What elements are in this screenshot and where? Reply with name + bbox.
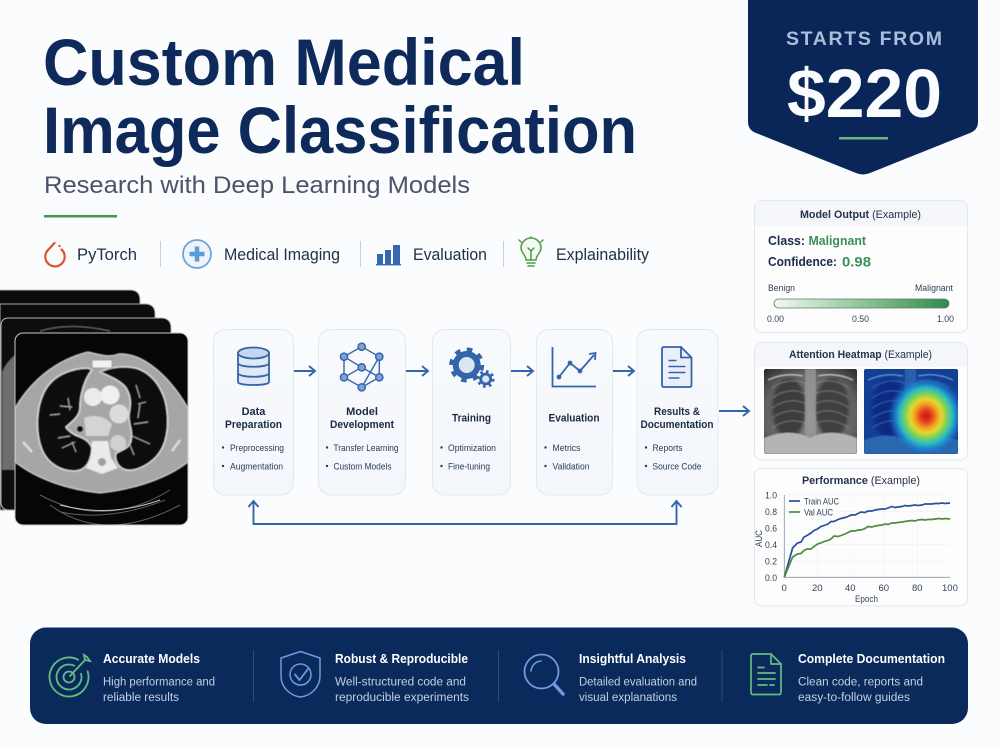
step: Evaluation: Metrics — [552, 443, 581, 454]
step: Data Preparation: Preparation — [225, 419, 282, 431]
benefit: Accurate Models: reliable results — [103, 692, 179, 704]
line chart: 1.0 — [765, 490, 777, 502]
benefit: Accurate Models — [45, 652, 215, 704]
price badge: STARTS FROM — [786, 28, 942, 50]
benefit: Insightful Analysis: visual explanations — [579, 692, 677, 704]
heatmap overlay on X-ray — [864, 369, 964, 456]
tag row — [45, 237, 650, 268]
chart legend: Val AUC — [804, 508, 833, 518]
icon: light bulb — [519, 237, 543, 266]
line chart: 40 — [845, 583, 856, 594]
step: Model Development: Transfer Learning — [334, 443, 398, 454]
benefit: Robust and Reproducible — [281, 652, 469, 704]
benefit: Insightful Analysis — [524, 652, 697, 704]
icon: bar chart — [376, 245, 401, 265]
step: Results and Documentation: Documentation — [640, 419, 714, 431]
CT main slice — [15, 333, 188, 525]
benefit: Robust and Reproducible: Robust & Reproducible — [335, 652, 468, 666]
benefit: Robust and Reproducible: reproducible experiments — [335, 692, 469, 704]
title: Custom Medical — [43, 25, 525, 99]
CT scan stack — [0, 290, 188, 525]
step: Evaluation — [536, 330, 612, 495]
arrows between steps — [294, 366, 749, 416]
benefit: Insightful Analysis: Detailed evaluation and — [579, 676, 697, 688]
step: Training: Fine-tuning — [448, 462, 490, 472]
step: Training: Training — [452, 412, 491, 424]
benefit: Complete Documentation: easy-to-follow guides — [798, 692, 910, 704]
line chart: 0.0 — [765, 573, 777, 584]
confidence result: Confidence: — [768, 255, 837, 269]
line chart: Epoch — [855, 594, 878, 605]
subtitle accent line — [44, 215, 117, 218]
chart legend: Train AUC — [804, 496, 839, 508]
line chart: 0.4 — [765, 540, 777, 551]
gauge: 1.00 — [937, 314, 954, 324]
step: Evaluation: Evaluation — [548, 412, 600, 424]
line chart: 20 — [812, 583, 823, 594]
icon: gears — [452, 350, 493, 386]
step: Model Development: Development — [330, 419, 394, 431]
benefits bar — [30, 628, 968, 724]
tag: Evaluation: Evaluation — [413, 246, 487, 264]
benefit: Complete Documentation: Complete Documentation — [798, 652, 945, 666]
gauge: 0.00 — [767, 314, 784, 324]
tag: Medical Imaging: Medical Imaging — [224, 246, 340, 264]
line chart: 60 — [878, 583, 889, 594]
step: Data Preparation: Preprocessing — [230, 443, 284, 454]
line chart — [754, 490, 958, 605]
benefit: Complete Documentation — [751, 652, 945, 704]
benefit: Accurate Models: High performance and — [103, 676, 215, 688]
step: Training — [432, 330, 510, 495]
icon: document — [751, 654, 781, 694]
step: Model Development — [318, 330, 406, 495]
price badge — [748, 0, 978, 174]
line chart: 0.2 — [765, 556, 777, 568]
icon: database — [238, 348, 269, 385]
feedback loop arrow — [248, 501, 682, 524]
icon: magnifier — [524, 654, 563, 694]
step: Results and Documentation: Reports — [652, 443, 683, 454]
title — [43, 25, 637, 167]
step: Results and Documentation: Source Code — [652, 462, 702, 472]
step: Training: Optimization — [448, 443, 496, 454]
panel: model output: 0.98 — [842, 254, 871, 270]
panel heading: Model Output (Example) — [800, 209, 921, 221]
workflow — [214, 330, 749, 524]
CT back slices — [0, 290, 171, 510]
benefit: Complete Documentation: Clean code, reports and — [798, 676, 923, 688]
tag: PyTorch: PyTorch — [77, 246, 137, 264]
gauge: Benign — [768, 283, 795, 293]
line chart: AUC — [754, 530, 764, 547]
panel heading: Performance (Example) — [802, 475, 920, 487]
icon: document — [662, 347, 692, 387]
panel: performance chart — [754, 468, 968, 606]
chart legend — [789, 496, 839, 518]
gauge — [767, 283, 954, 324]
line chart: 0 — [782, 583, 787, 594]
panel heading: Attention Heatmap (Example) — [789, 349, 932, 361]
benefit: Robust and Reproducible: Well-structured code and — [335, 676, 466, 688]
price badge: $220 — [787, 55, 942, 132]
icon: target — [45, 653, 93, 701]
step: Results and Documentation: Results & — [654, 406, 700, 418]
step: Model Development: Custom Models — [334, 462, 392, 472]
gauge: 0.50 — [852, 314, 869, 324]
subtitle: Research with Deep Learning Models — [44, 172, 470, 199]
step: Data Preparation — [214, 330, 294, 495]
panel: model output — [754, 200, 968, 332]
step: Evaluation: Validation — [552, 462, 590, 472]
tag: Explainability: Explainability — [556, 246, 650, 264]
step: Data Preparation: Data — [242, 406, 266, 418]
class result: Class: Malignant — [768, 234, 867, 248]
icon: medical cross — [183, 240, 211, 268]
icon: neural network — [340, 343, 383, 391]
line chart: 0.8 — [765, 507, 777, 518]
benefit: Accurate Models: Accurate Models — [103, 652, 200, 666]
step: Model Development: Model — [346, 406, 378, 418]
title: Image Classification — [43, 93, 637, 167]
benefit: Insightful Analysis: Insightful Analysis — [579, 652, 686, 666]
line chart: 80 — [912, 583, 923, 594]
chest X-ray — [764, 369, 857, 454]
icon: line chart — [552, 347, 596, 386]
line chart: 0.6 — [765, 524, 777, 534]
icon: shield check — [281, 652, 320, 697]
icon: PyTorch flame — [45, 243, 65, 266]
step: Results and Documentation — [637, 330, 718, 495]
panel: attention heatmap — [754, 342, 968, 460]
line chart: 100 — [942, 583, 958, 594]
gauge: Malignant — [915, 283, 953, 293]
step: Data Preparation: Augmentation — [230, 462, 283, 472]
